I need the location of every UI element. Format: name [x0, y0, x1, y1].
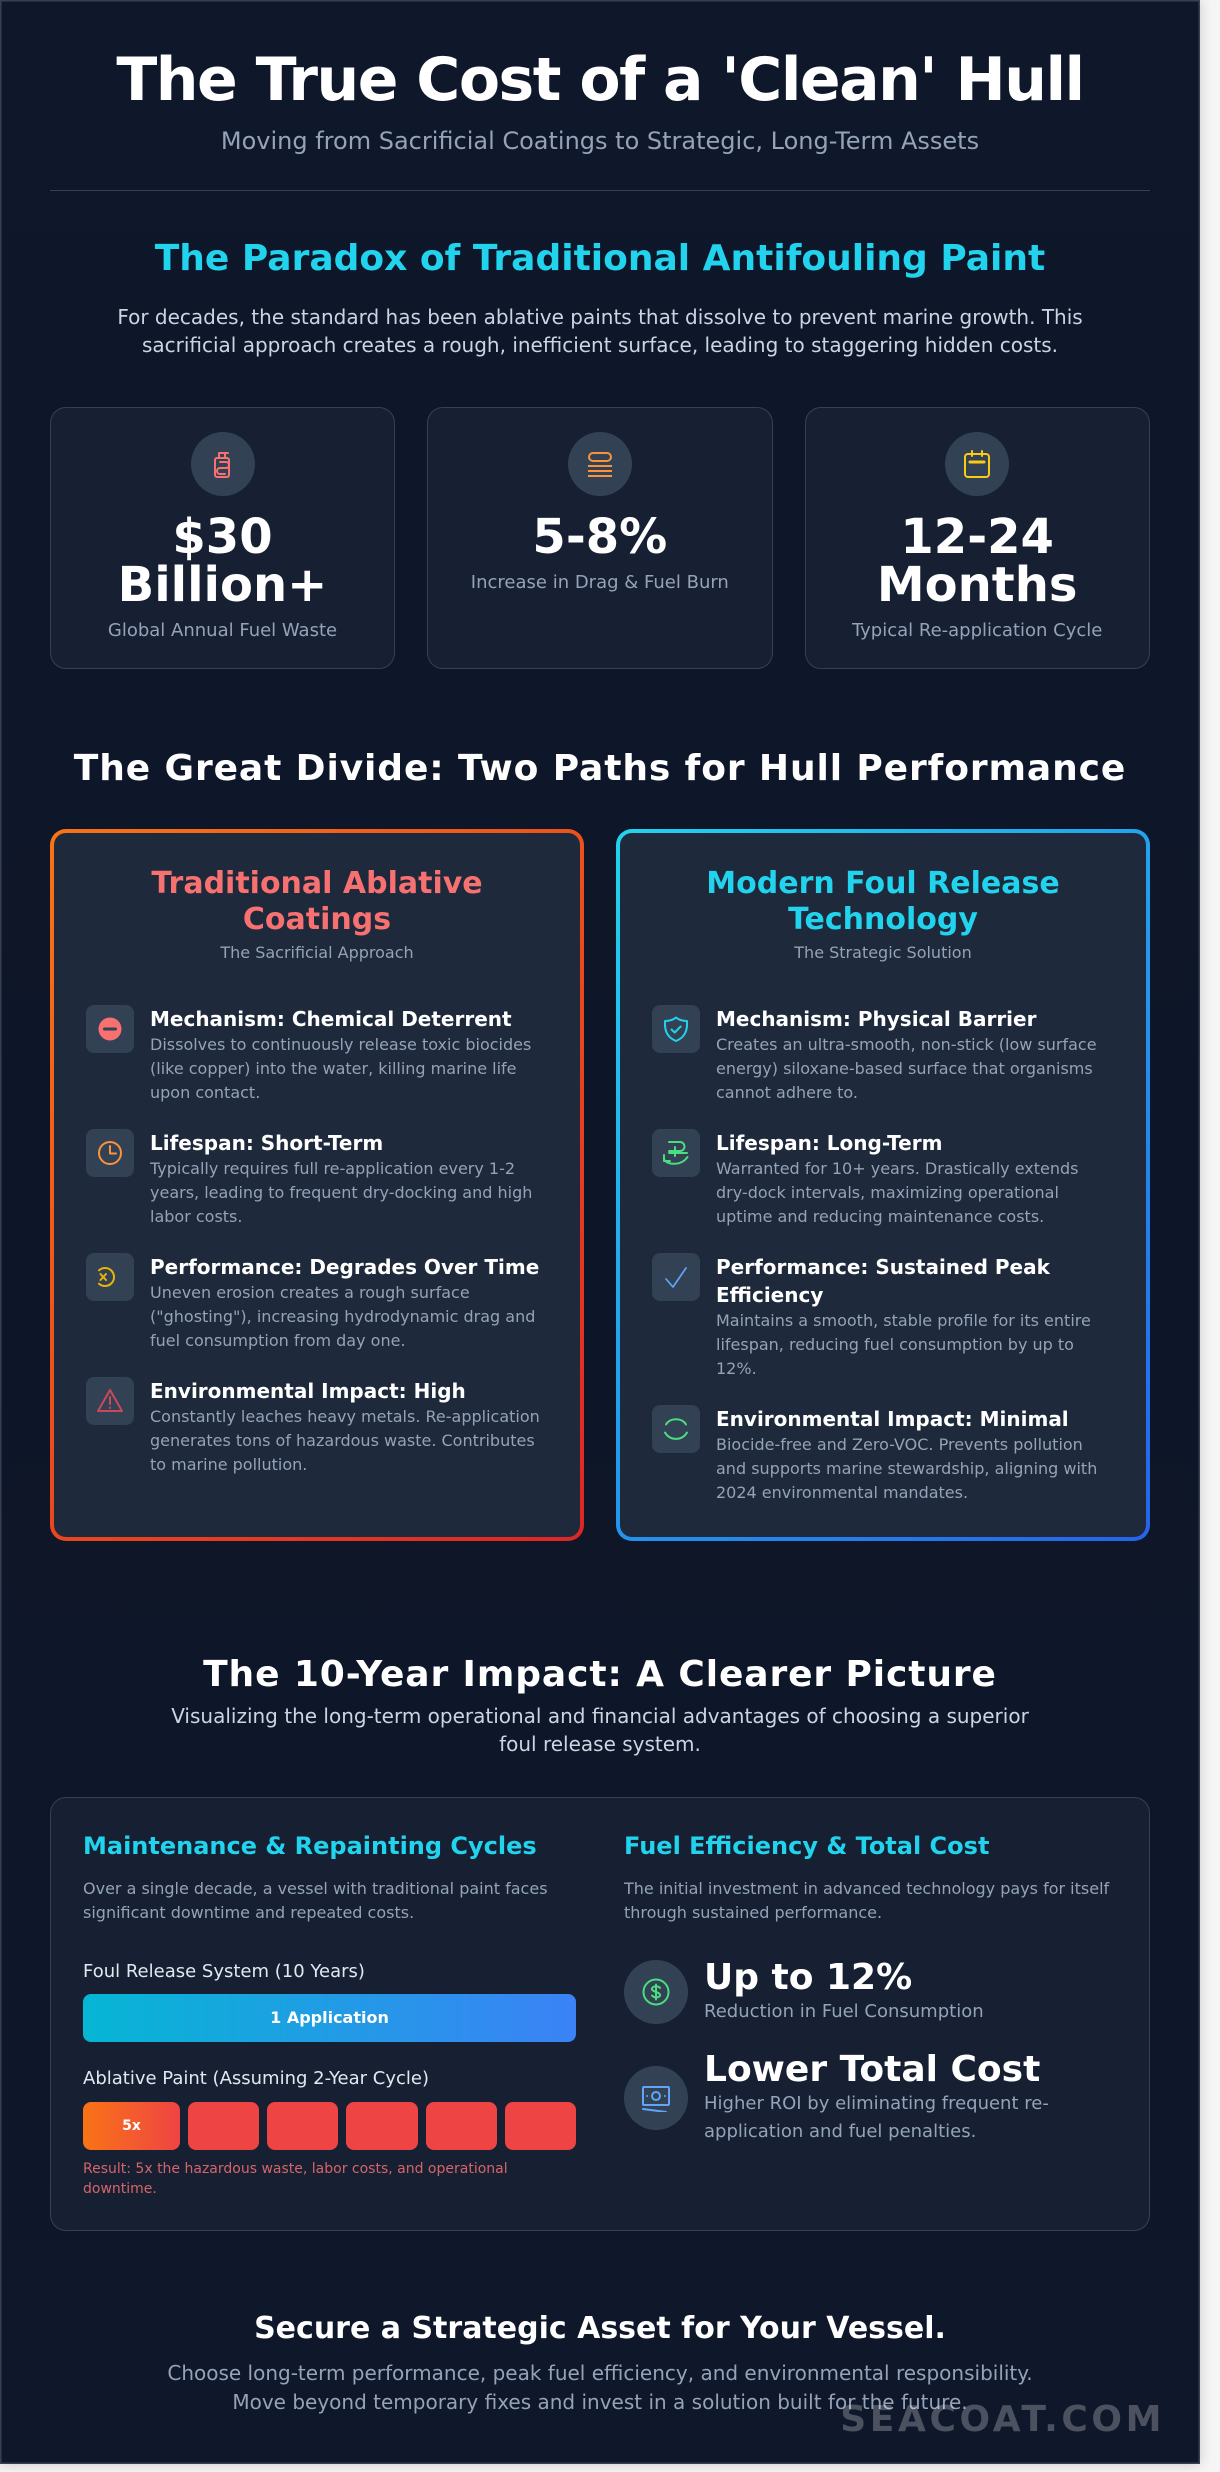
panel: impact	[50, 1797, 1150, 2231]
row text: Uneven erosion creates a rough surface	[150, 1283, 470, 1302]
heading: paradox: The Paradox of Traditional Antifouling Paint	[155, 238, 1045, 279]
column heading: Fuel Efficiency & Total Cost	[624, 1832, 989, 1860]
row: performance	[652, 1253, 1091, 1378]
row: performance	[86, 1253, 539, 1350]
row text: Dissolves to continuously release toxic biocides	[150, 1035, 531, 1054]
column text: significant downtime and repeated costs.	[83, 1903, 414, 1922]
stat value	[877, 509, 1077, 613]
heading: 10-year impact: The 10-Year Impact: A Clearer Picture	[203, 1654, 997, 1695]
row: environmental impact	[86, 1377, 540, 1474]
bar: 1 application: 1 Application	[270, 2008, 389, 2027]
icon: bottle	[190, 432, 254, 496]
column: maintenance cycles	[83, 1832, 576, 2197]
column heading: Maintenance & Repainting Cycles	[83, 1832, 537, 1860]
icon: calendar	[945, 432, 1009, 496]
panel: stat drag	[427, 407, 773, 669]
row: mechanism	[652, 1005, 1097, 1102]
row text: labor costs.	[150, 1207, 242, 1226]
row text: fuel consumption from day one.	[150, 1331, 406, 1350]
column text	[624, 1879, 1110, 1922]
stat label: Increase in Drag & Fuel Burn	[471, 572, 729, 593]
row text: Typically requires full re-application every 1-2	[150, 1159, 515, 1178]
panel title: Coatings	[243, 902, 391, 937]
call to action text	[167, 2361, 1033, 2414]
row text: and supports marine stewardship, aligning with	[716, 1459, 1097, 1478]
row text	[716, 1035, 1097, 1102]
stat value	[118, 509, 327, 613]
icon: arc with cross	[86, 1253, 134, 1301]
row text: years, leading to frequent dry-docking and high	[150, 1183, 532, 1202]
icon: minus circle	[86, 1005, 134, 1053]
result note: downtime.	[83, 2181, 157, 2197]
row text	[150, 1407, 540, 1474]
icon: dollar	[624, 1960, 688, 2024]
row text: Constantly leaches heavy metals. Re-application	[150, 1407, 540, 1426]
column text: The initial investment in advanced technology pays for itself	[624, 1879, 1109, 1898]
stat value: Billion+	[118, 557, 327, 613]
row text: generates tons of hazardous waste. Contributes	[150, 1431, 535, 1450]
column text: through sustained performance.	[624, 1903, 882, 1922]
stat label: Global Annual Fuel Waste	[108, 620, 337, 641]
row text: Biocide-free and Zero-VOC. Prevents pollution	[716, 1435, 1083, 1454]
row heading: Lifespan: Long-Term	[716, 1131, 942, 1155]
panel title: Technology	[788, 902, 978, 937]
row text	[150, 1159, 532, 1226]
icon: warning triangle	[86, 1377, 134, 1425]
panel subtitle: The Strategic Solution	[794, 943, 972, 962]
row text: Maintains a smooth, stable profile for its entire	[716, 1311, 1091, 1330]
bars: 5x applications	[83, 2102, 576, 2150]
stat label: Higher ROI by eliminating frequent re-	[704, 2093, 1049, 2114]
stat value: 12-24	[900, 509, 1054, 565]
stat label: Reduction in Fuel Consumption	[704, 2001, 984, 2022]
stat: up to 12%: Up to 12%	[704, 1957, 912, 1998]
stat value: 5-8%	[532, 509, 667, 565]
stat value: Months	[877, 557, 1077, 613]
row heading: Environmental Impact: Minimal	[716, 1407, 1069, 1431]
panel: traditional ablative coatings	[50, 829, 584, 1541]
row text: cannot adhere to.	[716, 1083, 858, 1102]
column: fuel efficiency	[624, 1832, 1110, 2142]
result note: Result: 5x the hazardous waste, labor costs, and operational	[83, 2161, 508, 2177]
row text: dry-dock intervals, maximizing operational	[716, 1183, 1059, 1202]
panel title	[706, 866, 1060, 937]
row: lifespan	[86, 1129, 532, 1226]
bar: 1 application	[83, 1994, 576, 2042]
row heading	[716, 1255, 1050, 1307]
subtitle: Moving from Sacrificial Coatings to Strategic, Long-Term Assets	[221, 127, 979, 155]
row: lifespan	[652, 1129, 1079, 1226]
row heading: Environmental Impact: High	[150, 1379, 466, 1403]
label: ablative: Ablative Paint (Assuming 2-Year Cycle)	[83, 2068, 429, 2089]
icon: banknotes	[624, 2066, 688, 2130]
impact intro	[171, 1704, 1029, 1756]
panel: stat fuel waste	[50, 407, 395, 669]
intro paragraph: For decades, the standard has been ablative paints that dissolve to prevent marine growth. This	[117, 305, 1083, 329]
row text: 2024 environmental mandates.	[716, 1483, 968, 1502]
row text: (like copper) into the water, killing marine life	[150, 1059, 517, 1078]
intro paragraph	[117, 305, 1083, 357]
result note	[83, 2161, 508, 2197]
impact intro: Visualizing the long-term operational and financial advantages of choosing a superior	[171, 1704, 1029, 1728]
stat: lower total cost: Lower Total Cost	[704, 2049, 1040, 2090]
bar: 5x: 5x	[122, 2118, 141, 2134]
call to action text: Move beyond temporary fixes and invest in a solution built for the future.	[232, 2390, 968, 2414]
stat label: Typical Re-application Cycle	[852, 620, 1102, 641]
icon: shield check	[652, 1005, 700, 1053]
row text	[716, 1311, 1091, 1378]
call to action heading: Secure a Strategic Asset for Your Vessel.	[254, 2311, 946, 2346]
column text	[83, 1879, 548, 1922]
row text: ("ghosting"), increasing hydrodynamic drag and	[150, 1307, 535, 1326]
watermark: SEACOAT.COM	[840, 2399, 1165, 2440]
call to action text: Choose long-term performance, peak fuel efficiency, and environmental responsibility.	[167, 2361, 1033, 2385]
row text: lifespan, reducing fuel consumption by up to	[716, 1335, 1074, 1354]
stat label: application and fuel penalties.	[704, 2121, 976, 2142]
row text: upon contact.	[150, 1083, 260, 1102]
icon: clock	[86, 1129, 134, 1177]
panel title: Modern Foul Release	[706, 866, 1060, 901]
panel subtitle: The Sacrificial Approach	[220, 943, 414, 962]
row text: to marine pollution.	[150, 1455, 307, 1474]
row: mechanism	[86, 1005, 531, 1102]
row text: uptime and reducing maintenance costs.	[716, 1207, 1044, 1226]
row text	[716, 1435, 1097, 1502]
row heading: Efficiency	[716, 1283, 823, 1307]
row text	[150, 1283, 535, 1350]
row heading: Lifespan: Short-Term	[150, 1131, 383, 1155]
row text: 12%.	[716, 1359, 757, 1378]
heading: great divide: The Great Divide: Two Paths for Hull Performance	[74, 748, 1126, 789]
panel: modern foul release technology	[616, 829, 1150, 1541]
panel: stat cycle	[805, 407, 1150, 669]
row heading: Mechanism: Chemical Deterrent	[150, 1007, 512, 1031]
row heading: Performance: Degrades Over Time	[150, 1255, 539, 1279]
label: foul release: Foul Release System (10 Years)	[83, 1961, 365, 1982]
row text: Creates an ultra-smooth, non-stick (low surface	[716, 1035, 1097, 1054]
bar: 5x	[83, 2102, 180, 2150]
column text: Over a single decade, a vessel with traditional paint faces	[83, 1879, 548, 1898]
row heading: Performance: Sustained Peak	[716, 1255, 1050, 1279]
icon: layered lines	[568, 432, 632, 496]
row heading: Mechanism: Physical Barrier	[716, 1007, 1036, 1031]
intro paragraph: sacrificial approach creates a rough, inefficient surface, leading to staggering hidden costs.	[142, 333, 1058, 357]
icon: green arcs	[652, 1405, 700, 1453]
icon: check mark	[652, 1253, 700, 1301]
panel title: Traditional Ablative	[151, 866, 483, 901]
title: The True Cost of a 'Clean' Hull	[116, 45, 1084, 115]
row text	[716, 1159, 1079, 1226]
row: environmental impact	[652, 1405, 1097, 1502]
row text: Warranted for 10+ years. Drastically extends	[716, 1159, 1079, 1178]
panel title	[151, 866, 483, 937]
row text	[150, 1035, 531, 1102]
row text: energy) siloxane-based surface that organisms	[716, 1059, 1093, 1078]
icon: cycle arrows	[652, 1129, 700, 1177]
stat label	[704, 2093, 1049, 2142]
stat value: $30	[172, 509, 273, 565]
impact intro: foul release system.	[499, 1732, 701, 1756]
